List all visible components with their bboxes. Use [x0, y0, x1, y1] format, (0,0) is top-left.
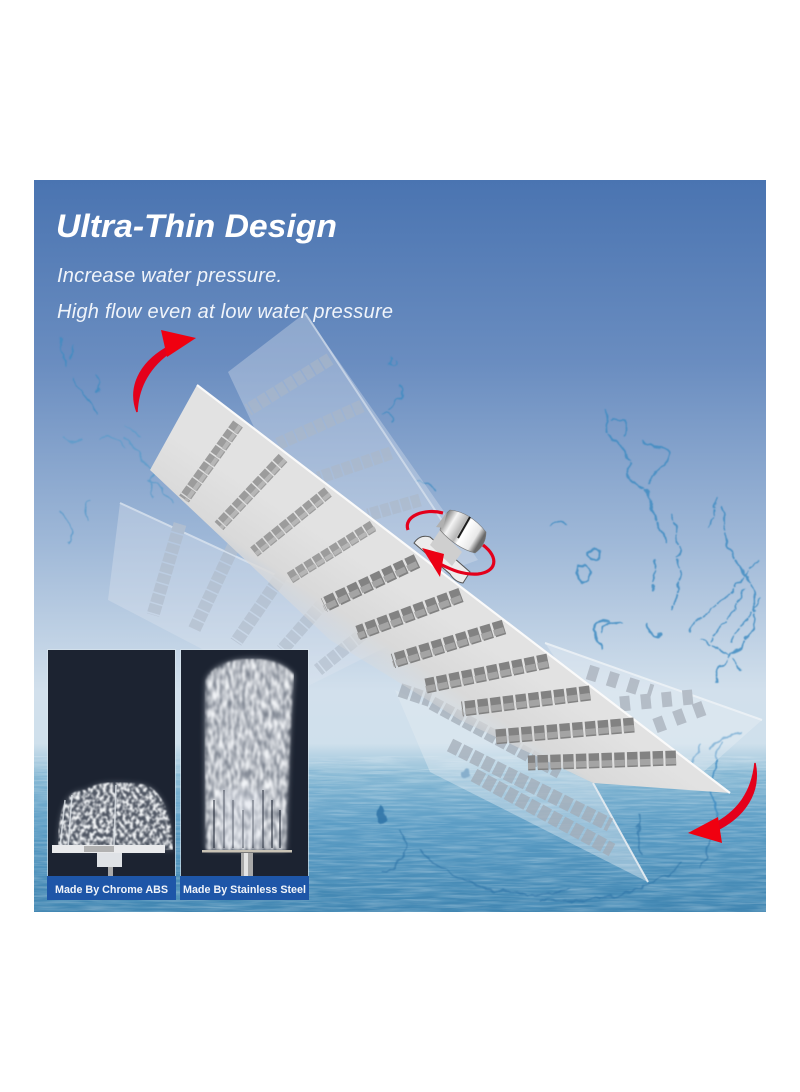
title: Ultra-Thin Design: [56, 208, 337, 244]
icon: rotation arrow around connector: [407, 512, 494, 577]
main shower head: [150, 385, 730, 793]
text: flow line: High flow even at low water pressure: [57, 301, 393, 323]
ghost shower head: left position: [108, 503, 400, 695]
ABS head and stem: [52, 845, 165, 853]
weak water spray: [58, 782, 173, 850]
panel: stainless steel comparison photo: [180, 649, 309, 900]
top chrome edge: [197, 385, 730, 793]
ghost shower head: right position: [545, 643, 762, 775]
nozzle rows: [184, 424, 676, 766]
text: pressure line: Increase water pressure.: [57, 265, 282, 287]
ghost shower head: top position: [228, 313, 478, 610]
connector: swivel ball joint: [414, 510, 486, 583]
panel: chrome ABS comparison photo: Made By Chrome ABS: [55, 884, 168, 896]
icon: upward curved arrow: [134, 330, 196, 412]
panel: chrome ABS comparison photo: [47, 649, 176, 900]
caption: [180, 876, 309, 900]
panel: stainless steel comparison photo: Made By Stainless Steel: [183, 884, 306, 896]
caption: [47, 876, 176, 900]
water splashes: [60, 340, 760, 901]
tall water spray: [205, 659, 294, 850]
icon: downward curved arrow: [688, 763, 756, 843]
ghost shower head: bottom position: [395, 690, 648, 882]
panel: product background: [34, 180, 766, 912]
stainless head and stem: [202, 850, 292, 852]
